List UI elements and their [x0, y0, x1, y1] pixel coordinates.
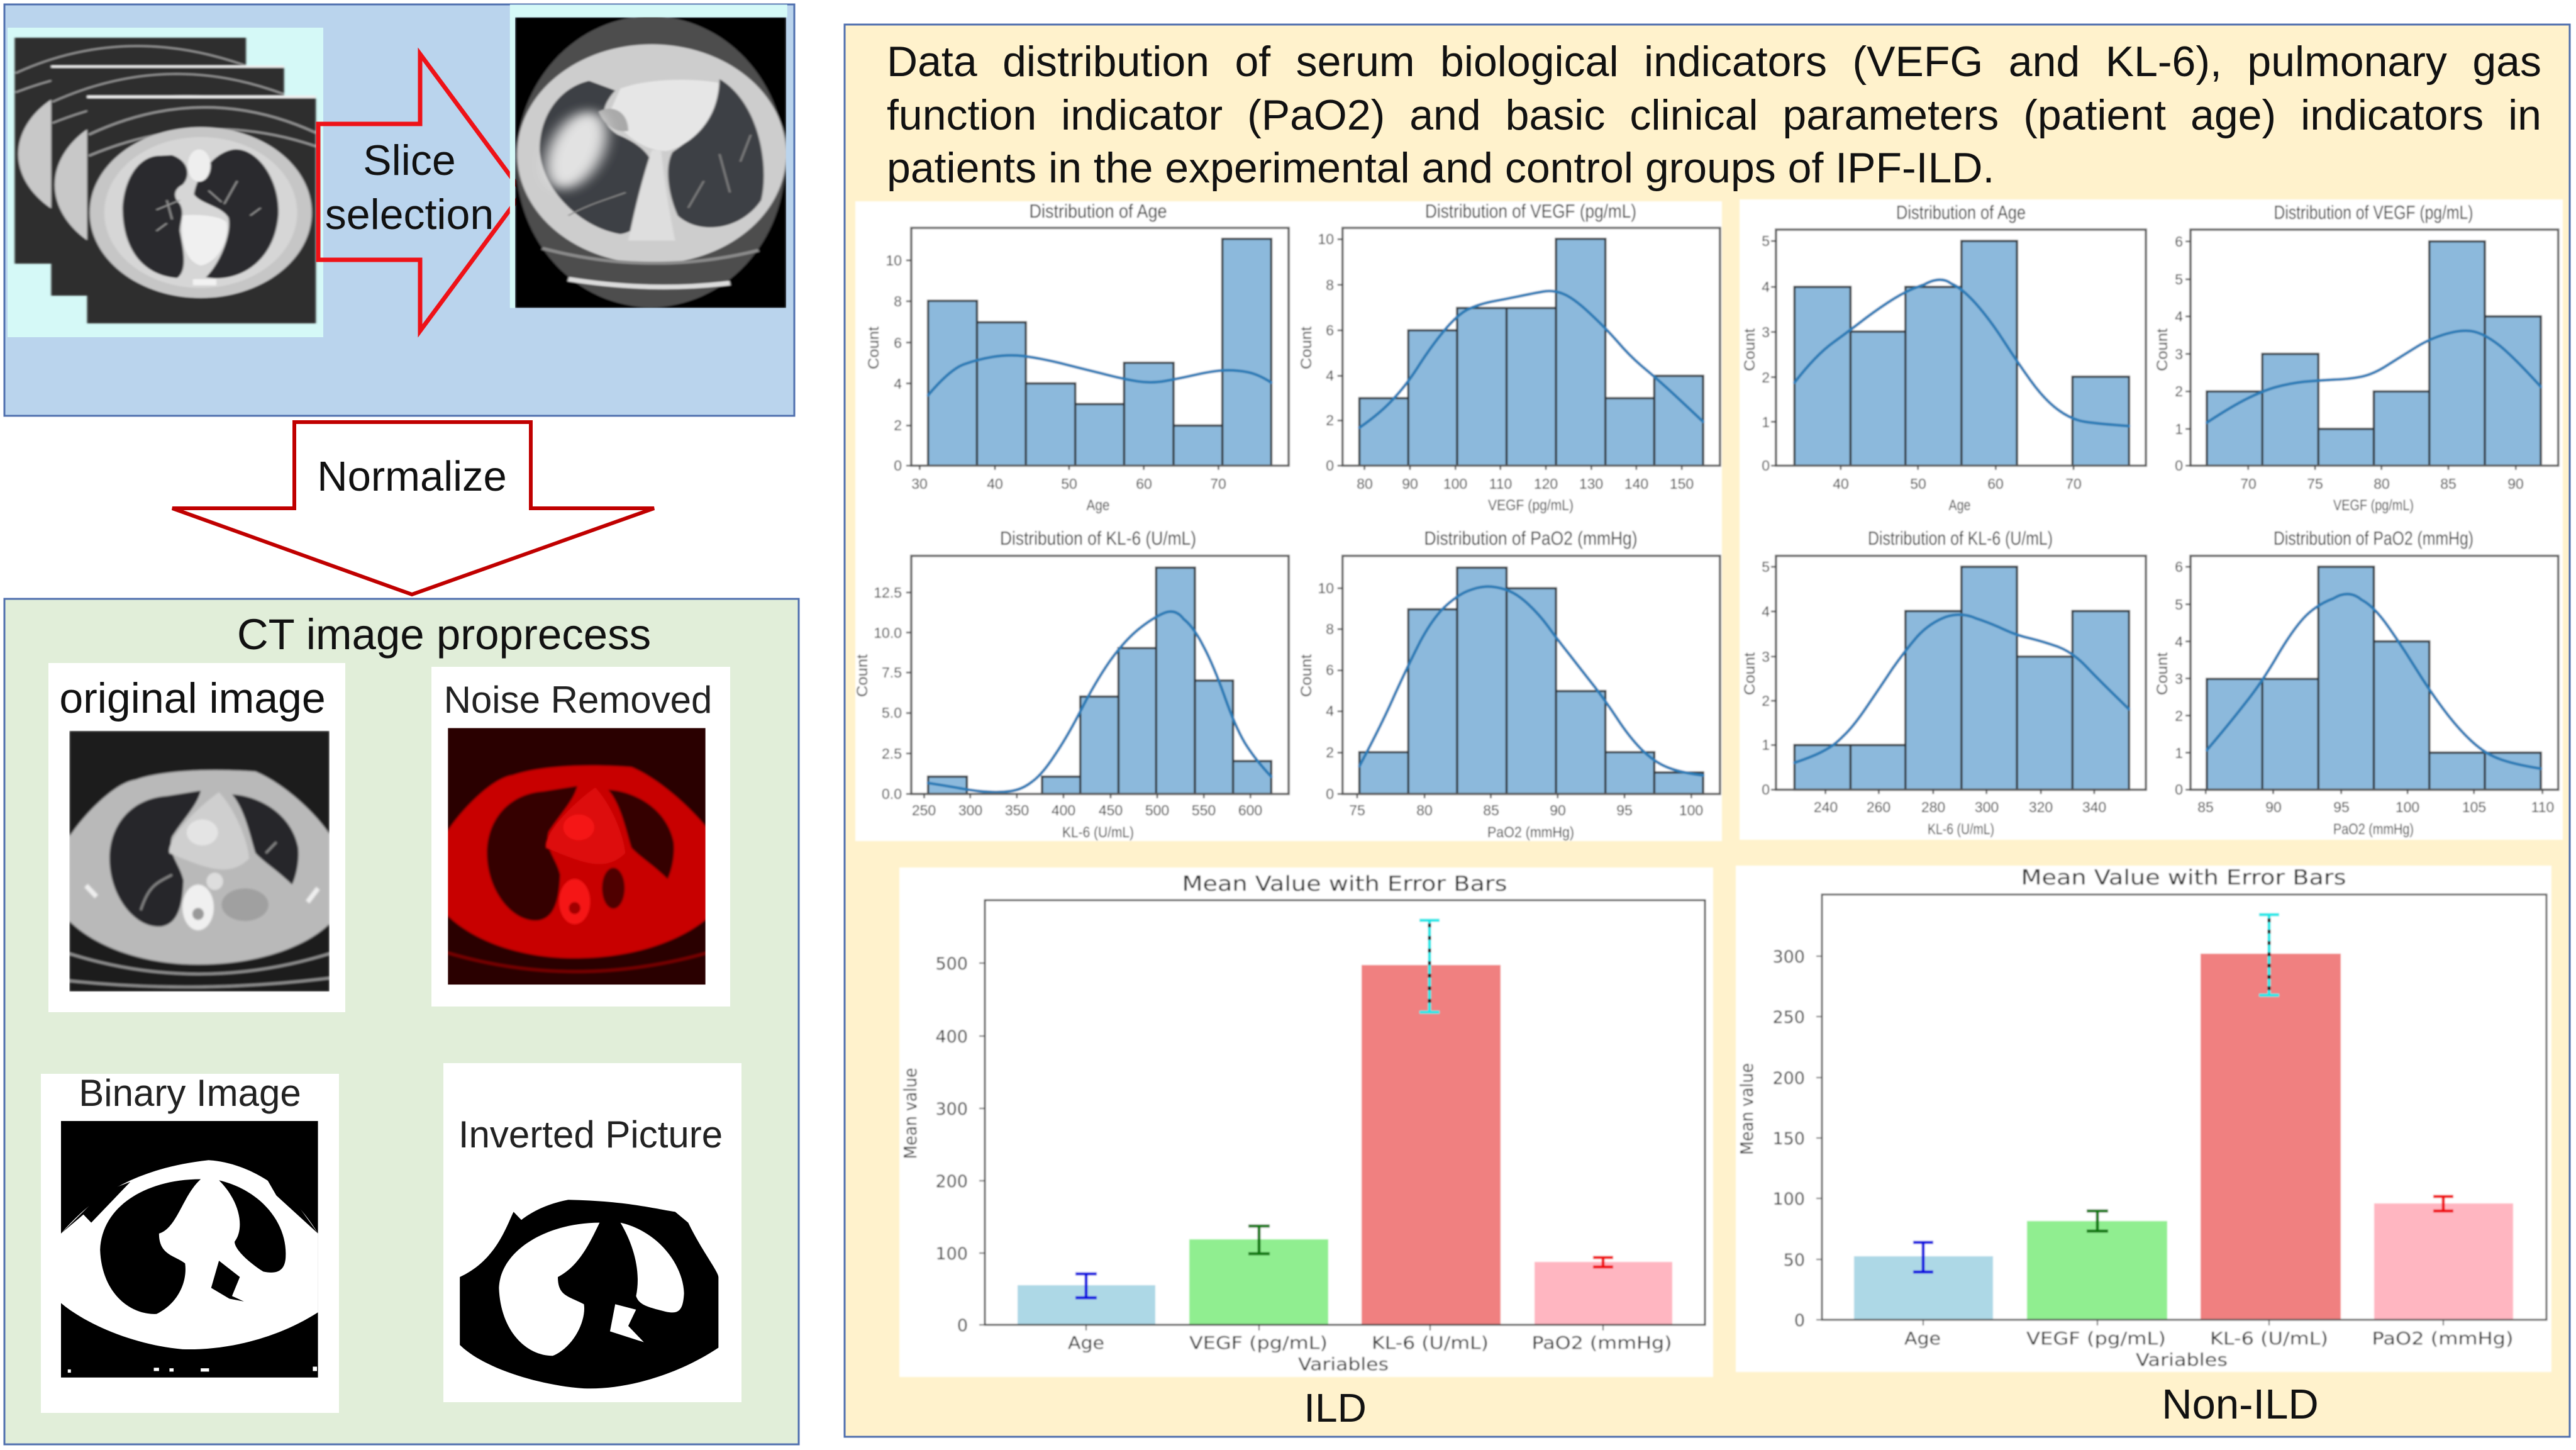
heading: data distribution description: function indicator (PaO2) and basic clinical parameters (patient age) indicators in: [887, 91, 2541, 138]
histogram: ILD age: Age: [1087, 497, 1109, 514]
histogram: ILD KL-6: 12.5: [874, 584, 902, 601]
histogram: ILD VEGF: [1298, 200, 1720, 514]
histogram: ILD PaO2: 0: [1326, 786, 1334, 802]
panel: ILD histograms: [854, 200, 1722, 841]
histogram: ILD KL-6: Count: [854, 654, 871, 697]
histogram: ILD VEGF: 110: [1489, 476, 1512, 492]
histogram: Non-ILD PaO2: 85: [2197, 799, 2214, 815]
label: ILD: ILD: [1304, 1385, 1367, 1430]
histogram: ILD age: Distribution of Age: [1029, 200, 1167, 222]
panel: Non-ILD histograms: [1740, 199, 2563, 840]
bar chart: ILD mean values: [899, 867, 1713, 1377]
histogram: Non-ILD age: 70: [2065, 476, 2082, 492]
histogram: ILD PaO2: 8: [1326, 621, 1334, 637]
histogram: ILD VEGF: 90: [1402, 476, 1418, 492]
sub-panel: binary image: Binary Image: [79, 1072, 301, 1114]
histogram: Non-ILD age: 3: [1762, 324, 1770, 340]
heading: CT image propreccess: CT image proprecess: [237, 610, 651, 659]
bar chart: ILD mean values: Variables: [1298, 1354, 1389, 1375]
histogram: ILD VEGF: 130: [1579, 476, 1603, 492]
bar chart: Non-ILD mean values: 250: [1772, 1008, 1805, 1027]
histogram: Non-ILD VEGF: 0: [2175, 457, 2183, 474]
histogram: ILD age: 50: [1061, 476, 1077, 492]
histogram: ILD VEGF: 0: [1326, 457, 1334, 474]
sub-panel: binary image: [41, 1072, 339, 1413]
bar chart: Non-ILD mean values: Age: [1904, 1328, 1941, 1349]
histogram: Non-ILD VEGF: Count: [2154, 328, 2171, 371]
histogram: ILD VEGF: VEGF (pg/mL): [1488, 497, 1574, 514]
histogram: Non-ILD age: 50: [1910, 476, 1926, 492]
histogram: Non-ILD VEGF: 4: [2175, 308, 2183, 325]
histogram: ILD age: 70: [1210, 476, 1226, 492]
histogram: ILD PaO2: 4: [1326, 703, 1334, 719]
histogram: ILD KL-6: 600: [1238, 802, 1262, 818]
histogram: ILD PaO2: 75: [1349, 802, 1365, 818]
histogram: Non-ILD PaO2: [2154, 527, 2558, 838]
heading: data distribution description: patients in the experimental and control groups of IPF-ILD.: [887, 144, 1994, 192]
image: selected CT slice: [510, 4, 787, 308]
arrow: normalize: Normalize: [317, 453, 507, 500]
histogram: Non-ILD KL-6: [1741, 527, 2146, 838]
bar chart: ILD mean values: VEGF (pg/mL): [1189, 1332, 1328, 1353]
histogram: Non-ILD KL-6: Distribution of KL-6 (U/mL): [1868, 527, 2053, 549]
bar chart: Non-ILD mean values: 200: [1772, 1069, 1805, 1088]
histogram: Non-ILD VEGF: VEGF (pg/mL): [2333, 497, 2414, 514]
bar chart: ILD mean values: 400: [935, 1027, 968, 1047]
histogram: ILD KL-6: 450: [1099, 802, 1123, 818]
histogram: Non-ILD VEGF: 70: [2240, 476, 2257, 492]
bar chart: ILD mean values: 0: [957, 1316, 968, 1336]
histogram: Non-ILD KL-6: Count: [1741, 652, 1758, 695]
histogram: Non-ILD VEGF: 3: [2175, 346, 2183, 362]
histogram: Non-ILD VEGF: 75: [2307, 476, 2323, 492]
bar chart: Non-ILD mean values: KL-6 (U/mL): [2210, 1328, 2328, 1349]
histogram: ILD age: 2: [894, 417, 902, 433]
histogram: ILD PaO2: 90: [1550, 802, 1566, 818]
histogram: ILD age: 8: [894, 293, 902, 310]
histogram: ILD age: 60: [1136, 476, 1152, 492]
label: slice selection: [325, 137, 494, 238]
histogram: ILD KL-6: 0.0: [882, 786, 902, 802]
bar chart: ILD mean values: 100: [935, 1244, 968, 1264]
bar chart: ILD mean values: KL-6 (U/mL): [1372, 1332, 1489, 1353]
histogram: Non-ILD age: 4: [1762, 279, 1770, 295]
bar chart: ILD mean values: 300: [935, 1100, 968, 1119]
heading: data distribution description: Data distribution of serum biological indicators (VEFG and KL-6), pulmonary gas: [887, 38, 2541, 86]
histogram: ILD VEGF: 10: [1318, 231, 1334, 247]
bar chart: ILD mean values: 500: [935, 954, 968, 974]
histogram: Non-ILD age: 60: [1987, 476, 2004, 492]
bar chart: Non-ILD mean values: [1736, 865, 2551, 1372]
histogram: ILD age: 0: [894, 457, 902, 474]
histogram: ILD age: 4: [894, 376, 902, 392]
heading: data distribution description: [887, 35, 2547, 199]
histogram: Non-ILD PaO2: 3: [2175, 671, 2183, 687]
histogram: Non-ILD PaO2: 105: [2462, 799, 2486, 815]
histogram: Non-ILD KL-6: 260: [1867, 799, 1890, 815]
bar chart: Non-ILD mean values: Mean Value with Error Bars: [2021, 865, 2346, 890]
panel: data distribution: [845, 25, 2570, 1437]
histogram: Non-ILD age: 40: [1833, 476, 1849, 492]
histogram: ILD PaO2: Distribution of PaO2 (mmHg): [1424, 527, 1638, 549]
histogram: ILD VEGF: 120: [1534, 476, 1558, 492]
bar chart: ILD mean values: Age: [1068, 1332, 1104, 1353]
histogram: ILD VEGF: 2: [1326, 412, 1334, 428]
histogram: ILD KL-6: 400: [1052, 802, 1075, 818]
label: slice selection: Slice: [363, 137, 456, 184]
histogram: ILD PaO2: 100: [1679, 802, 1703, 818]
histogram: ILD PaO2: 85: [1483, 802, 1499, 818]
label: slice selection: selection: [325, 191, 494, 238]
histogram: ILD KL-6: 7.5: [882, 664, 902, 681]
histogram: ILD VEGF: 6: [1326, 322, 1334, 338]
bar chart: Non-ILD mean values: PaO2 (mmHg): [2372, 1328, 2513, 1349]
histogram: ILD VEGF: 80: [1357, 476, 1373, 492]
histogram: Non-ILD VEGF: Distribution of VEGF (pg/mL): [2274, 201, 2473, 223]
sub-panel: original image: original image: [59, 674, 326, 722]
histogram: Non-ILD VEGF: [2154, 201, 2558, 514]
histogram: Non-ILD PaO2: 110: [2531, 799, 2554, 815]
label: Non-ILD: Non-ILD: [2162, 1381, 2319, 1428]
histogram: ILD VEGF: 140: [1624, 476, 1648, 492]
histogram: Non-ILD VEGF: 80: [2373, 476, 2390, 492]
histogram: ILD PaO2: [1298, 527, 1720, 841]
histogram: Non-ILD VEGF: 5: [2175, 271, 2183, 287]
histogram: Non-ILD VEGF: 6: [2175, 233, 2183, 250]
histogram: ILD KL-6: 300: [958, 802, 982, 818]
histogram: ILD age: Count: [865, 326, 882, 369]
bar chart: Non-ILD mean values: 0: [1794, 1311, 1805, 1330]
histogram: ILD KL-6: Distribution of KL-6 (U/mL): [1000, 527, 1196, 549]
histogram: Non-ILD KL-6: 1: [1762, 737, 1770, 753]
histogram: Non-ILD KL-6: 240: [1814, 799, 1838, 815]
histogram: ILD PaO2: 2: [1326, 744, 1334, 761]
sub-panel: inverted picture: [443, 1063, 741, 1402]
histogram: Non-ILD PaO2: 6: [2175, 559, 2183, 575]
histogram: ILD PaO2: Count: [1298, 654, 1315, 697]
panel: CT image preprocess: [4, 599, 799, 1444]
sub-panel: noise removed: [431, 667, 730, 1007]
histogram: ILD VEGF: 8: [1326, 277, 1334, 293]
histogram: ILD PaO2: 6: [1326, 662, 1334, 678]
histogram: Non-ILD age: [1741, 201, 2146, 514]
histogram: Non-ILD PaO2: 90: [2265, 799, 2282, 815]
histogram: Non-ILD VEGF: 1: [2175, 421, 2183, 437]
histogram: ILD KL-6: 250: [912, 802, 936, 818]
histogram: Non-ILD KL-6: 0: [1762, 781, 1770, 798]
bar chart: Non-ILD mean values: Mean value: [1736, 1063, 1757, 1155]
histogram: Non-ILD PaO2: 1: [2175, 745, 2183, 761]
histogram: ILD PaO2: PaO2 (mmHg): [1487, 824, 1574, 841]
histogram: ILD VEGF: Distribution of VEGF (pg/mL): [1425, 200, 1636, 222]
histogram: ILD age: 6: [894, 335, 902, 351]
histogram: ILD PaO2: 80: [1416, 802, 1433, 818]
bar chart: Non-ILD mean values: 100: [1772, 1190, 1805, 1209]
histogram: ILD age: 30: [911, 476, 928, 492]
bar chart: Non-ILD mean values: Variables: [2136, 1349, 2228, 1370]
histogram: ILD PaO2: 95: [1616, 802, 1633, 818]
histogram: ILD KL-6: KL-6 (U/mL): [1062, 824, 1134, 841]
histogram: Non-ILD age: 2: [1762, 369, 1770, 386]
histogram: Non-ILD PaO2: 4: [2175, 633, 2183, 650]
histogram: ILD VEGF: Count: [1298, 326, 1315, 369]
histogram: Non-ILD VEGF: 2: [2175, 383, 2183, 399]
histogram: Non-ILD KL-6: 2: [1762, 693, 1770, 709]
histogram: Non-ILD age: 0: [1762, 457, 1770, 474]
histogram: Non-ILD KL-6: 320: [2029, 799, 2053, 815]
sub-panel: original image: [48, 663, 345, 1012]
bar chart: Non-ILD mean values: 150: [1772, 1129, 1805, 1149]
histogram: Non-ILD PaO2: Distribution of PaO2 (mmHg): [2273, 527, 2473, 549]
bar chart: ILD mean values: PaO2 (mmHg): [1532, 1332, 1672, 1353]
histogram: Non-ILD KL-6: 3: [1762, 649, 1770, 665]
histogram: Non-ILD age: 5: [1762, 233, 1770, 249]
histogram: ILD KL-6: 2.5: [882, 745, 902, 762]
bar chart: Non-ILD mean values: 50: [1784, 1251, 1805, 1270]
histogram: ILD PaO2: 10: [1318, 580, 1334, 596]
histogram: ILD KL-6: 5.0: [882, 705, 902, 721]
histogram: Non-ILD PaO2: 5: [2175, 596, 2183, 613]
histogram: Non-ILD PaO2: 2: [2175, 708, 2183, 724]
histogram: Non-ILD PaO2: Count: [2154, 652, 2171, 695]
histogram: Non-ILD age: Distribution of Age: [1896, 201, 2026, 223]
arrow: slice selection: [318, 54, 523, 331]
histogram: Non-ILD VEGF: 90: [2507, 476, 2524, 492]
histogram: ILD KL-6: 350: [1005, 802, 1029, 818]
histogram: Non-ILD VEGF: 85: [2440, 476, 2457, 492]
panel: slice selection: [4, 4, 794, 416]
sub-panel: inverted picture: Inverted Picture: [458, 1113, 723, 1156]
bar chart: ILD mean values: Mean value: [900, 1068, 921, 1159]
histogram: Non-ILD PaO2: 0: [2175, 781, 2183, 798]
bar chart: ILD mean values: Mean Value with Error Bars: [1182, 871, 1507, 896]
histogram: ILD KL-6: 10.0: [874, 625, 902, 641]
bar chart: Non-ILD mean values: 300: [1772, 947, 1805, 967]
histogram: ILD KL-6: 550: [1192, 802, 1216, 818]
histogram: ILD age: [865, 200, 1289, 514]
histogram: Non-ILD age: 1: [1762, 414, 1770, 430]
histogram: ILD VEGF: 100: [1443, 476, 1467, 492]
image stack: CT slices: [8, 28, 323, 337]
histogram: Non-ILD KL-6: 280: [1921, 799, 1945, 815]
histogram: ILD KL-6: 500: [1145, 802, 1169, 818]
histogram: Non-ILD KL-6: 5: [1762, 559, 1770, 575]
histogram: Non-ILD PaO2: PaO2 (mmHg): [2333, 821, 2414, 838]
bar chart: Non-ILD mean values: VEGF (pg/mL): [2026, 1328, 2166, 1349]
histogram: Non-ILD KL-6: KL-6 (U/mL): [1928, 821, 1994, 838]
sub-panel: noise removed: Noise Removed: [444, 679, 712, 721]
histogram: Non-ILD PaO2: 95: [2333, 799, 2350, 815]
histogram: ILD KL-6: [854, 527, 1289, 841]
histogram: ILD age: 40: [987, 476, 1003, 492]
histogram: Non-ILD KL-6: 4: [1762, 603, 1770, 620]
arrow: normalize: [172, 422, 654, 594]
histogram: Non-ILD age: Count: [1741, 328, 1758, 371]
histogram: ILD age: 10: [886, 252, 902, 269]
histogram: Non-ILD KL-6: 300: [1975, 799, 1999, 815]
histogram: Non-ILD KL-6: 340: [2082, 799, 2106, 815]
histogram: ILD VEGF: 150: [1670, 476, 1694, 492]
histogram: Non-ILD PaO2: 100: [2396, 799, 2419, 815]
histogram: Non-ILD age: Age: [1948, 497, 1971, 514]
histogram: ILD VEGF: 4: [1326, 367, 1334, 384]
bar chart: ILD mean values: 200: [935, 1172, 968, 1191]
